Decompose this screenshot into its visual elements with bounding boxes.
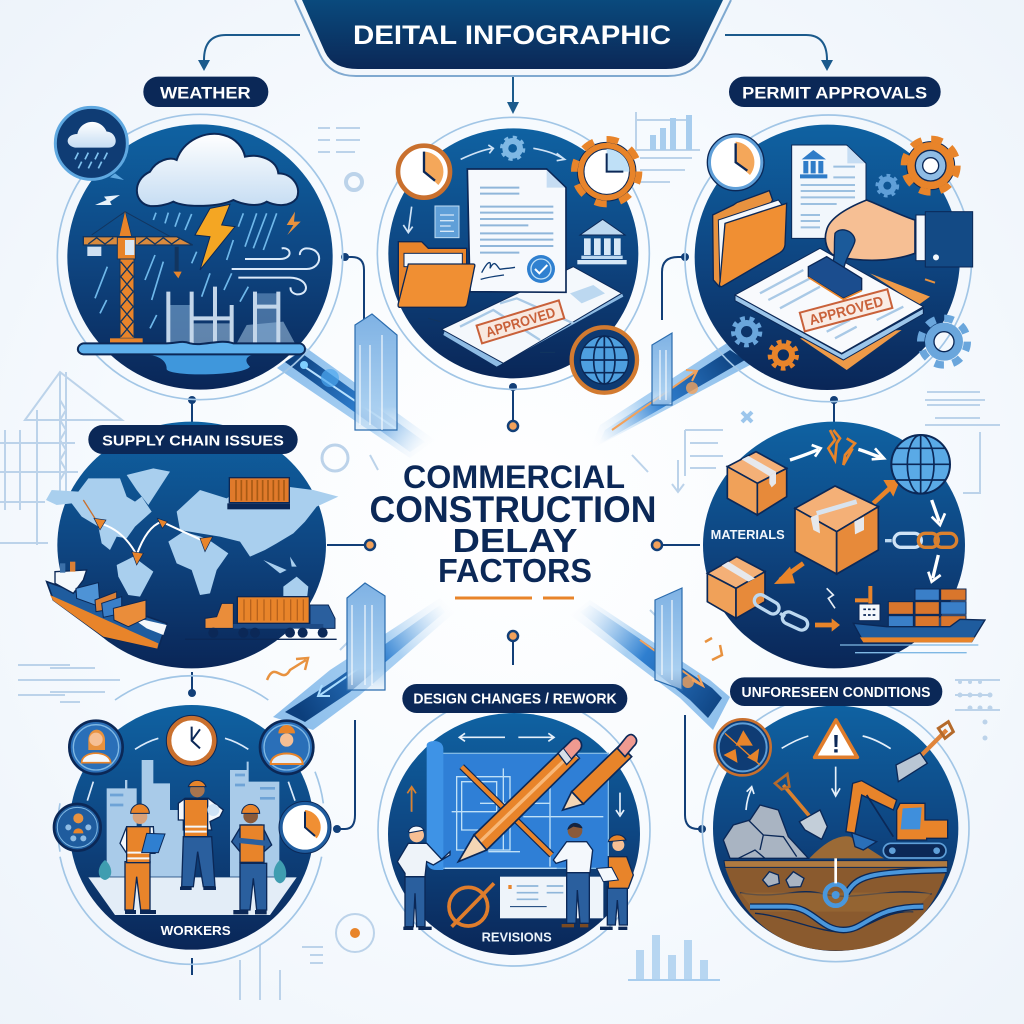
icon: document: [467, 169, 566, 292]
icon: truck: [185, 597, 337, 639]
central title: COMMERCIAL: [403, 459, 625, 495]
icon: shovel right: [896, 722, 953, 782]
label: supply chain issues: SUPPLY CHAIN ISSUES: [102, 432, 284, 449]
decorative arcs: [87, 738, 295, 801]
icon: permit document: [792, 145, 866, 238]
icon: orange pins: [428, 318, 555, 352]
icon: box tape: [722, 456, 864, 582]
icon: small arrows: [746, 736, 891, 810]
icon: prohibited: [449, 883, 494, 927]
panel: unforeseen conditions: [702, 677, 969, 962]
icon: world map: [46, 468, 338, 602]
icon: dirt pile: [809, 836, 884, 858]
icon: crack: [828, 430, 855, 465]
icon: folder: [398, 242, 475, 307]
icon: worker right: [232, 804, 272, 914]
icon: scaffold: [168, 287, 295, 343]
diagonal beams: [273, 343, 750, 730]
icon: orange gear: [904, 139, 957, 192]
connector dots: [188, 253, 838, 833]
icon: pencil large: [458, 738, 582, 862]
icon: approved paper: APPROVED: [808, 294, 885, 329]
icon: worker centre: [178, 780, 223, 890]
icon: flood water: [78, 342, 305, 374]
icon: clock: [398, 146, 450, 198]
central title: CONSTRUCTION: [370, 489, 656, 530]
icon: bolt small: [287, 212, 301, 235]
icon: cargo ship: [840, 586, 985, 653]
panel: permit approvals: [685, 77, 973, 402]
header banner: [295, 0, 731, 76]
panel: design changes / rework: [378, 684, 650, 966]
panel: approvals centre: [377, 117, 649, 393]
label: materials: MATERIALS: [711, 528, 785, 542]
icon: rocks: [723, 805, 808, 858]
icon: thin cross: [462, 767, 552, 855]
icon: lightning: [195, 204, 235, 270]
label: permit approvals: [729, 77, 941, 107]
icon: gears: [733, 318, 967, 368]
icon: gear clock: [574, 139, 639, 204]
icon: orange underlay: [800, 273, 930, 370]
icon: approved paper: APPROVED: [484, 305, 558, 341]
icon: small stones: [763, 872, 804, 887]
icon: approved paper: [735, 248, 923, 360]
icon: key: [925, 279, 935, 283]
icon: clock: [166, 715, 217, 766]
icon: pencil small: [563, 735, 637, 810]
background bar charts: [350, 115, 992, 981]
icon: ground: [88, 877, 297, 915]
icon: warning: [815, 720, 857, 759]
label: design changes: [402, 684, 627, 713]
icon: shovel left: [775, 774, 827, 839]
decorative orange squiggles: [267, 638, 722, 680]
header banner: DEITAL INFOGRAPHIC: [353, 20, 671, 50]
icon: globe: [572, 327, 637, 393]
icon: lightning small: [95, 195, 120, 205]
icon: avatar woman: [69, 721, 123, 774]
icon: spark: [827, 588, 835, 608]
icon: rain badge: [55, 107, 127, 180]
icon: approved paper: [442, 267, 623, 367]
icon: small document: [435, 206, 459, 238]
icon: team badge: [54, 804, 101, 851]
label: unforeseen conditions: UNFORESEEN CONDITIONS: [741, 685, 931, 701]
icon: chains: [752, 533, 957, 632]
icon: bank: [577, 219, 627, 264]
icon: person right: [597, 835, 633, 930]
central title: FACTORS: [438, 552, 592, 589]
icon: cargo ship: [47, 562, 167, 649]
label: supply chain issues: [88, 425, 298, 454]
background buildings: [347, 314, 682, 690]
icon: container on rail: [227, 478, 290, 509]
label: design changes: DESIGN CHANGES / REWORK: [413, 692, 617, 708]
icon: blueprint: [427, 741, 608, 870]
icon: hand with stamp: [808, 200, 973, 299]
icon: skyline: [107, 760, 279, 877]
icon: clock wedge: [279, 801, 331, 853]
icon: wind: [232, 248, 319, 294]
icon: folder: [713, 191, 787, 287]
label: weather: [143, 77, 268, 107]
connector arrows from banner: [198, 35, 833, 114]
icon: arrows: [774, 445, 945, 632]
icon: excavator: [846, 781, 948, 858]
label: weather: WEATHER: [160, 83, 251, 102]
icon: revisions sheet: [500, 877, 603, 918]
icon: globe: [891, 435, 950, 494]
central title: DELAY: [452, 522, 578, 559]
icon: hazard badge: [715, 719, 771, 775]
label: unforeseen conditions: [730, 677, 942, 706]
route markers: [83, 500, 213, 565]
icon: soil layers: [724, 861, 948, 951]
panel: supply chain issues: [46, 422, 338, 668]
panel: materials: [703, 422, 985, 668]
icon: small gear: [502, 138, 523, 159]
icon: warning: !: [832, 732, 840, 759]
icon: avatar builder: [260, 721, 313, 774]
label: workers: WORKERS: [161, 923, 231, 938]
label: permit approvals: PERMIT APPROVALS: [742, 83, 927, 102]
icon: storm cloud: [137, 134, 298, 206]
panel: weather: [55, 77, 343, 400]
central title: [370, 459, 656, 598]
icon: small arrows: [412, 737, 620, 814]
icon: person centre: [553, 823, 593, 927]
icon: flow arrows: [403, 145, 565, 233]
icon: clock: [707, 134, 764, 191]
icon: person left: [397, 826, 450, 930]
icon: worker left: [120, 804, 165, 914]
label: revisions: REVISIONS: [482, 931, 552, 945]
icon: buried pipes: [750, 855, 947, 930]
panel: workers: [54, 676, 331, 964]
icon: trees: [99, 860, 286, 883]
icon: small gear: [877, 176, 897, 196]
icon: crane: [83, 212, 193, 343]
icon: boxes: [707, 452, 878, 618]
connector lines: [192, 257, 834, 975]
